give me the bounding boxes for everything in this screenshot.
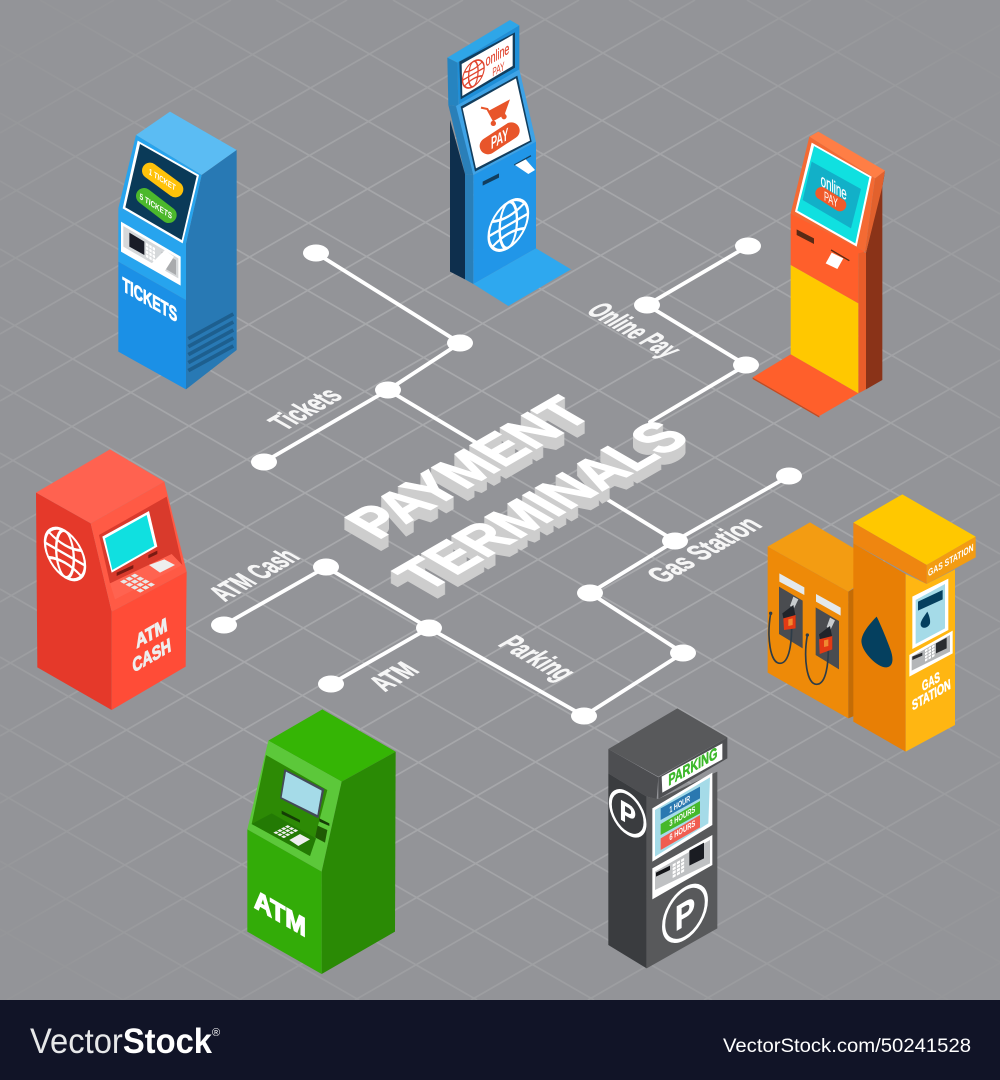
screen <box>102 511 157 573</box>
globe icon <box>489 191 528 259</box>
payment panel <box>652 835 712 899</box>
top sign: online <box>486 40 509 71</box>
screen with hour buttons: 1 HOUR <box>669 793 691 815</box>
pay screen <box>461 76 532 172</box>
globe icon <box>45 519 85 588</box>
text: ATM: ATM <box>254 883 306 943</box>
ticket printer panel <box>121 222 181 286</box>
sign: PARKING: PARKING <box>668 745 717 790</box>
text: ATM CASH: ATM <box>135 613 168 652</box>
screen: 1 TICKET <box>148 166 177 193</box>
screen <box>123 141 199 243</box>
screen with hour buttons: 6 HOURS <box>669 818 695 843</box>
parking symbol: front <box>664 876 706 950</box>
payment unit <box>853 494 976 752</box>
terminal: atm cash (red) <box>36 449 187 710</box>
parking symbol: side <box>610 783 645 843</box>
screen: 5 TICKETS <box>139 191 173 221</box>
footer bar <box>0 1000 1000 1080</box>
label: Parking: Parking <box>491 631 584 685</box>
sign: PARKING <box>662 743 722 793</box>
footer logo: VectorStock <box>30 1022 212 1061</box>
screen with hour buttons <box>652 773 712 862</box>
screen: online <box>821 169 847 204</box>
text: TICKETS: TICKETS <box>122 274 177 327</box>
terminal: atm cash (red): CASH <box>131 634 172 677</box>
top sign <box>459 32 515 99</box>
label: Gas Station: Gas Station <box>639 512 770 588</box>
fuel pump unit <box>768 522 854 718</box>
connector lines and nodes <box>211 238 802 724</box>
top sign: PAY <box>492 59 504 80</box>
label: ATM: ATM <box>361 657 427 696</box>
screen: PAY <box>824 188 838 211</box>
label: ATM Cash: ATM Cash <box>201 544 307 606</box>
title: TERMINALS <box>380 412 703 599</box>
title: PAYMENT <box>331 388 606 547</box>
screen with hour buttons: 3 HOURS <box>669 804 695 829</box>
vents <box>188 314 233 371</box>
label: Online Pay: Online Pay <box>579 298 690 362</box>
terminal: atm (green) <box>247 709 396 974</box>
label: Tickets: Tickets <box>261 383 350 435</box>
terminal: online pay (blue kiosk) <box>447 20 571 306</box>
payment unit: GAS <box>921 668 940 694</box>
footer registered mark: ® <box>212 1027 220 1039</box>
terminal: parking (grey) <box>608 708 727 968</box>
footer url: VectorStock.com/50241528 <box>723 1036 971 1057</box>
payment unit: GAS STATION <box>928 542 974 580</box>
terminal: gas station <box>768 494 976 752</box>
pay screen: PAY <box>491 123 509 153</box>
terminal: online pay (orange kiosk) <box>753 132 885 418</box>
screen <box>795 143 872 247</box>
screen <box>280 769 324 818</box>
parking symbol: side: P <box>620 794 636 834</box>
parking symbol: front: P <box>675 890 695 939</box>
terminal: tickets (blue) <box>118 112 237 389</box>
payment unit: STATION <box>911 675 951 714</box>
